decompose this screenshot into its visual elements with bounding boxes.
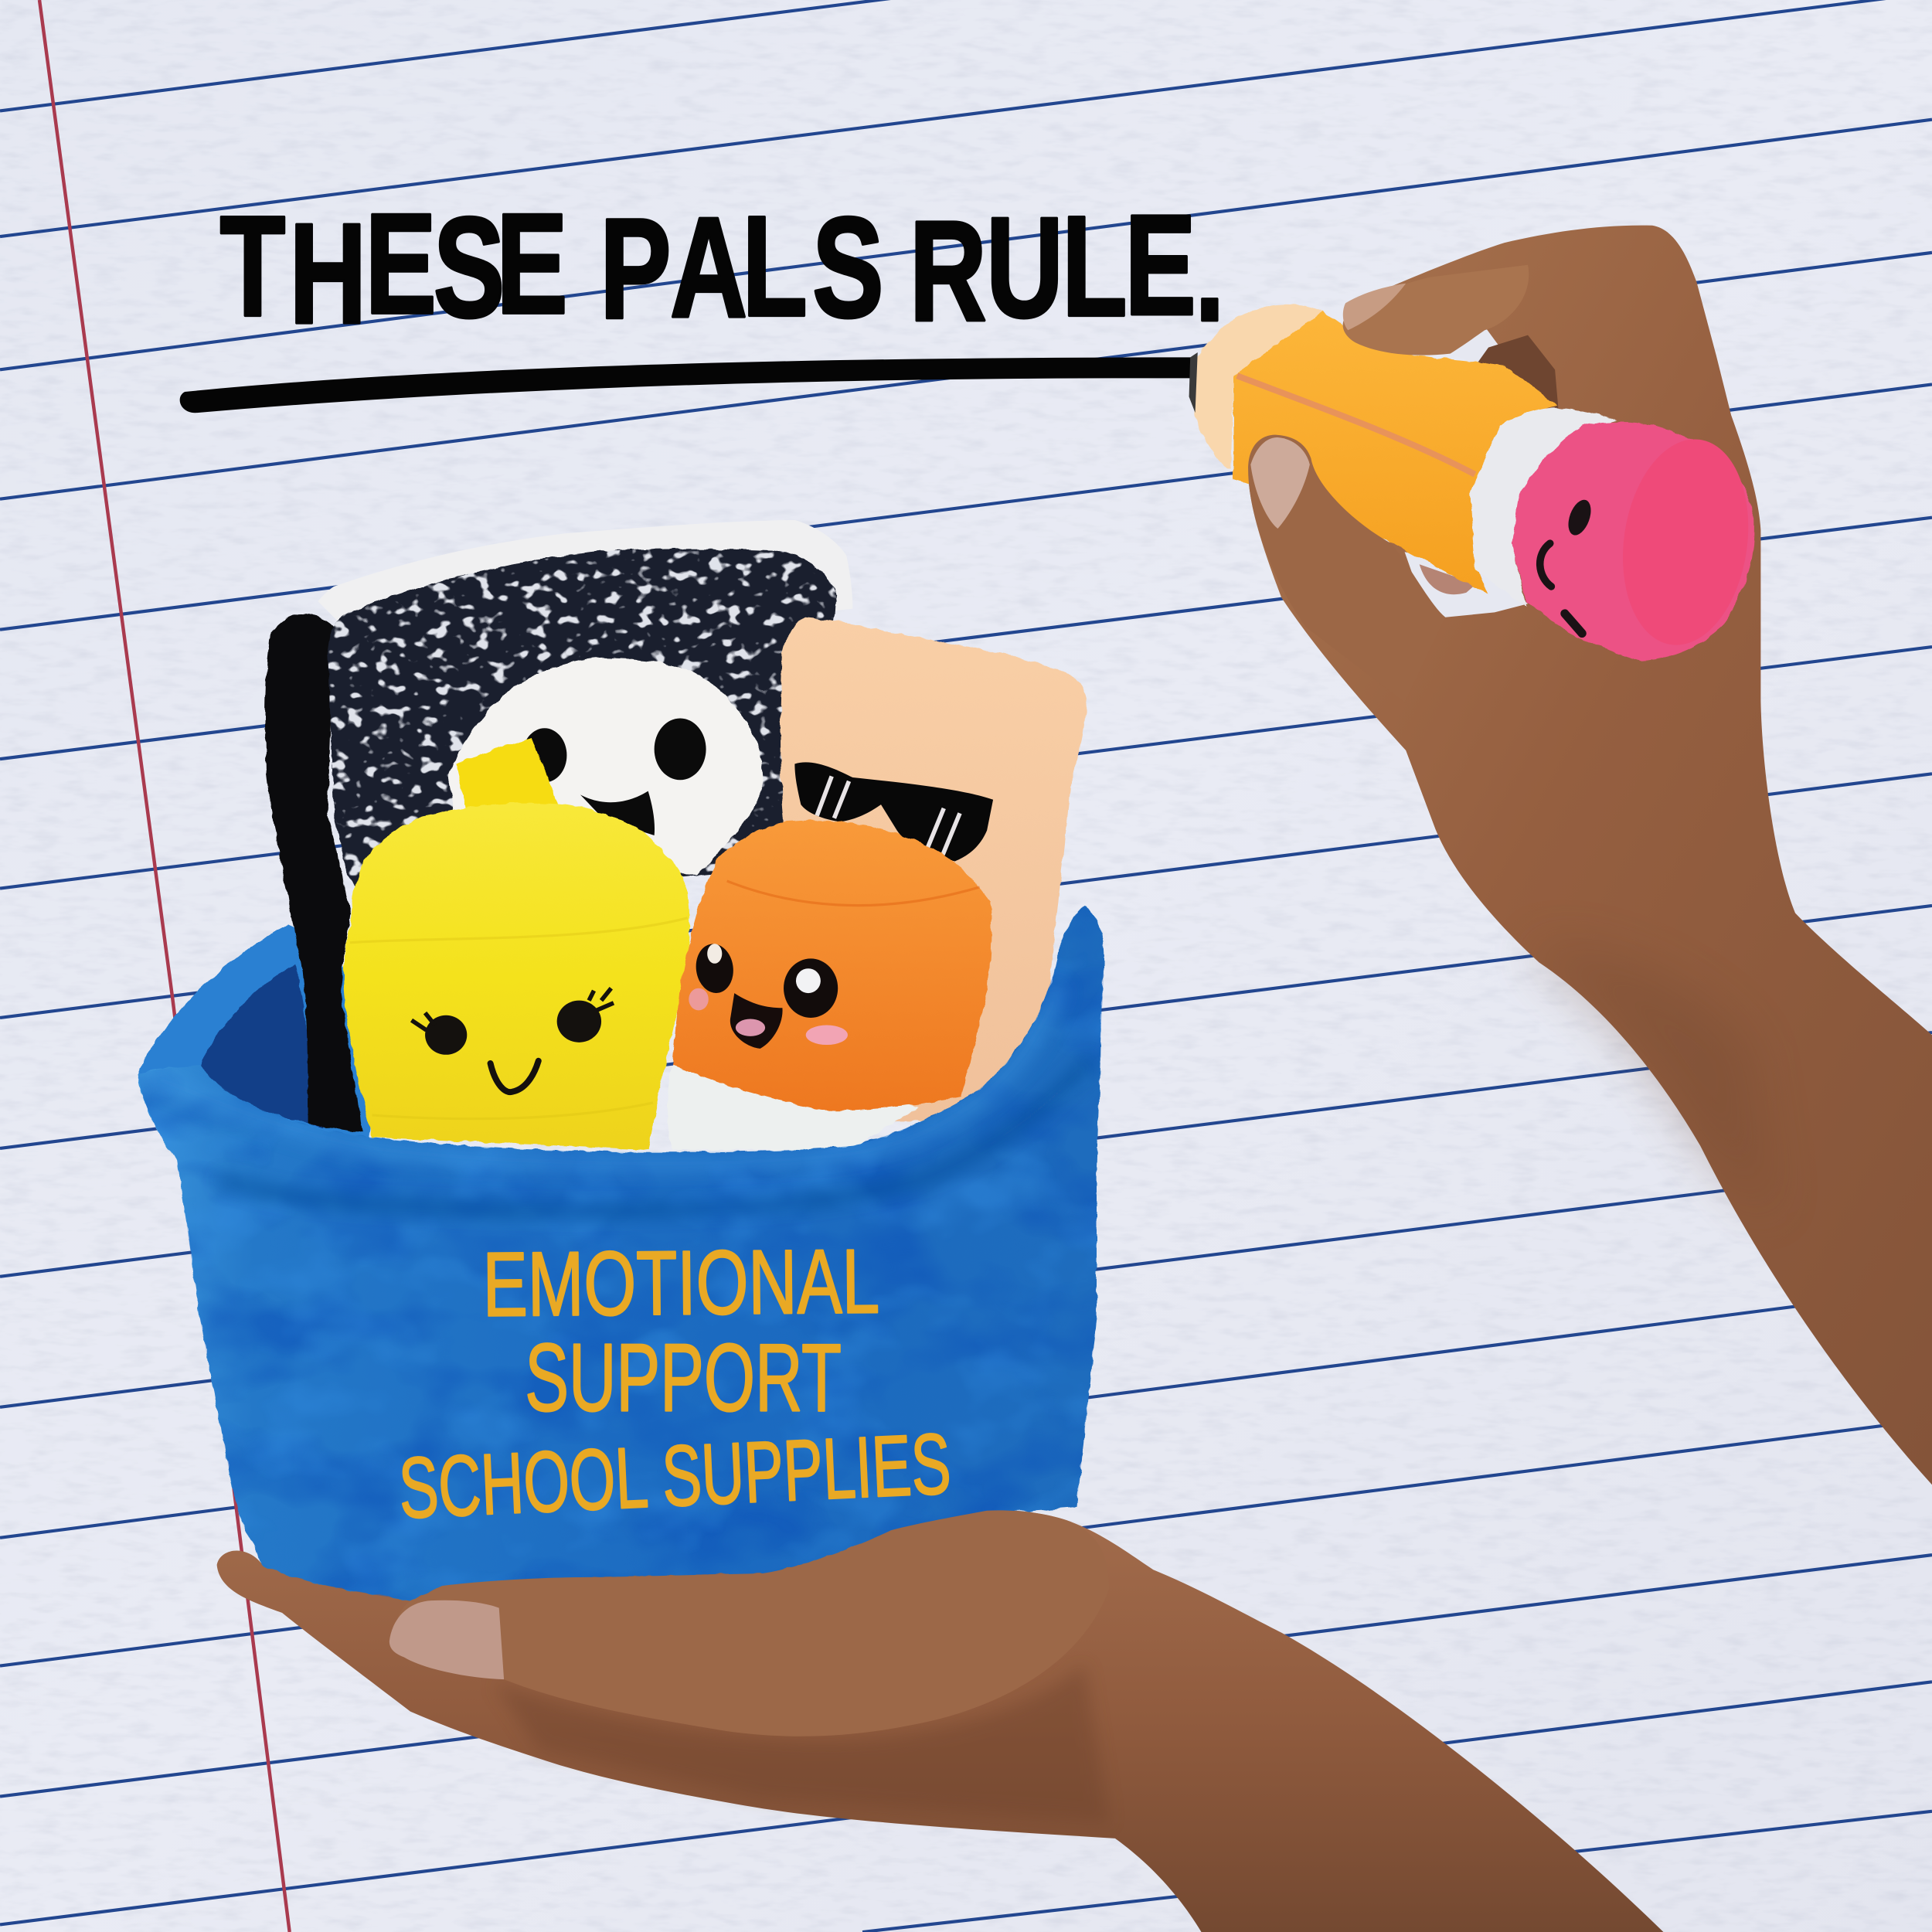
bin body bbox=[138, 906, 1104, 1600]
highlighter cap tab bbox=[456, 738, 558, 817]
plush: yellow highlighter bbox=[344, 738, 689, 1150]
interior shadow bbox=[199, 964, 323, 1128]
notebook white face bbox=[448, 658, 763, 875]
pencil lead bbox=[1189, 352, 1198, 413]
embroidered line: support: SUPPORT bbox=[525, 1325, 842, 1432]
plush bin bbox=[123, 900, 1109, 1614]
fingernail bbox=[389, 1600, 504, 1679]
palm shadow under finger bbox=[493, 1663, 1109, 1824]
plush: ruler with sunglasses bbox=[780, 617, 1087, 1121]
pencil pink eraser bbox=[1512, 422, 1753, 662]
pencil yellow body bbox=[1233, 311, 1556, 594]
underline stroke drawn by pencil bbox=[180, 357, 1198, 413]
notebook white page edge bbox=[318, 520, 852, 628]
embroidered line: emotional: EMOTIONAL bbox=[482, 1230, 880, 1336]
plush: notebook bbox=[266, 520, 862, 1132]
thumb over pencil bbox=[1248, 435, 1445, 702]
pencil white ferrule bbox=[1470, 408, 1617, 607]
highlighter body bbox=[344, 803, 689, 1150]
ruler body bbox=[780, 617, 1087, 1121]
highlighter face bbox=[412, 988, 614, 1092]
gap below pencil bbox=[1405, 552, 1528, 617]
eraser face bbox=[689, 941, 848, 1049]
pencil centre stripe bbox=[1237, 376, 1475, 474]
plush: orange eraser bbox=[667, 821, 991, 1150]
notebook black spine bbox=[266, 614, 362, 1132]
notebook marble cover bbox=[328, 549, 837, 912]
embroidered line: school supplies: SCHOOL SUPPLIES bbox=[397, 1415, 953, 1536]
upper hand and arm bbox=[1248, 226, 1932, 1485]
index fingernail bbox=[1343, 284, 1406, 330]
eraser end cap bbox=[1611, 431, 1761, 653]
notebook marble speckle bbox=[328, 549, 836, 876]
pale fingertip behind pencil bbox=[1420, 564, 1476, 594]
plush pencil with pink eraser bbox=[1189, 304, 1761, 662]
highlighter seams bbox=[350, 918, 688, 1119]
pencil wood tip bbox=[1191, 304, 1325, 469]
finger resting over bin base bbox=[389, 1510, 1109, 1736]
palm shadow bbox=[1528, 947, 1774, 1219]
ruler sunglasses bbox=[794, 762, 993, 861]
eraser top seam bbox=[727, 881, 980, 906]
thumbnail bbox=[1250, 437, 1310, 529]
bin interior back wall bbox=[138, 924, 369, 1146]
pencil face bbox=[1540, 497, 1595, 634]
index fingertip over pencil bbox=[1343, 265, 1529, 355]
notebook eyes and mouth bbox=[522, 719, 706, 835]
gap between index finger and pencil bbox=[1451, 327, 1498, 365]
ring finger behind pencil bbox=[1476, 335, 1559, 413]
heading: These pals rule: THESE PALS RULE. bbox=[220, 184, 1225, 353]
bin tie-dye patches bbox=[123, 900, 1109, 1614]
bin embroidered text bbox=[397, 1230, 953, 1536]
lower hand holding bin bbox=[217, 1509, 1663, 1932]
eraser orange body bbox=[673, 821, 991, 1111]
eraser white base bbox=[667, 1066, 918, 1150]
